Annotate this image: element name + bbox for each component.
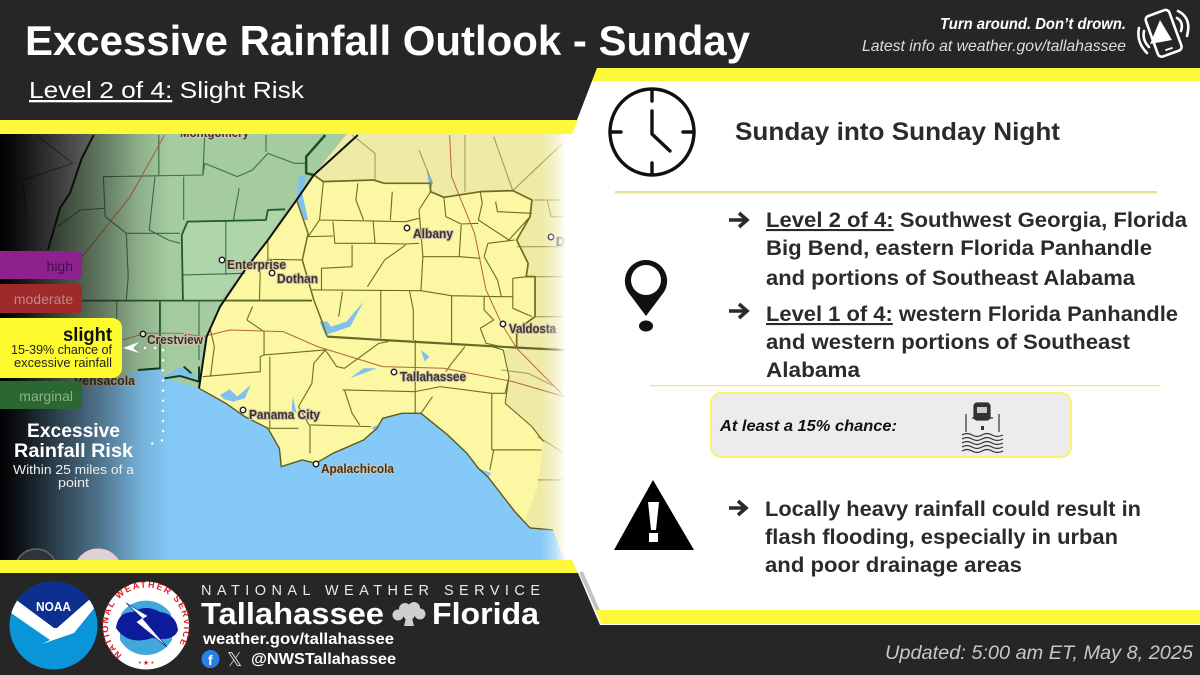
icon: NOAA logo — [8, 575, 98, 670]
icon: location pin — [625, 260, 667, 332]
city labels: Apalachicola — [321, 462, 395, 476]
legend: high: high — [47, 258, 73, 274]
text block: level 1 area: Level 1 of 4: western Florida Panhandle — [766, 303, 1178, 326]
text block: level 2 area: Level 2 of 4: Southwest Georgia, Florida — [766, 209, 1187, 232]
footer band — [0, 560, 1200, 675]
footer web and social: 𝕏 — [227, 650, 242, 671]
map caption: excessive rainfall risk — [13, 421, 135, 490]
icon: clock — [610, 89, 694, 175]
footer web and social — [202, 631, 396, 671]
text block: flash flooding: and poor drainage areas — [765, 554, 1022, 577]
footer office name — [201, 583, 540, 631]
footer office name: NATIONAL WEATHER SERVICE — [201, 583, 540, 599]
legend: slight: 15-39% chance of — [11, 343, 113, 357]
city labels: Montgomery — [180, 126, 249, 140]
text block: level 2 area — [729, 209, 1187, 290]
text block: level 1 area — [729, 303, 1178, 382]
time heading: Sunday into Sunday Night — [735, 118, 1061, 146]
footer web and social: f — [208, 652, 213, 668]
icon: warning triangle — [614, 480, 694, 550]
risk boundary line — [199, 135, 358, 388]
icon: NWS logo: NATIONAL WEATHER SERVICE — [102, 581, 190, 660]
icon: tree — [392, 602, 426, 626]
legend: slight — [0, 318, 122, 378]
icon: NWS logo: • ★ • — [138, 659, 154, 667]
map caption: excessive rainfall risk: Excessive — [27, 421, 120, 442]
icon: flooded car — [962, 403, 1003, 452]
city labels: Enterprise — [227, 258, 286, 272]
city labels: Panama City — [249, 408, 320, 422]
map caption: excessive rainfall risk: Rainfall Risk — [14, 441, 133, 462]
city labels — [74, 126, 565, 476]
city labels: Pensacola — [74, 374, 136, 388]
title: Excessive Rainfall Outlook - Sunday — [25, 17, 751, 64]
legend: moderate: moderate — [14, 291, 73, 307]
city labels: Tallahassee — [400, 370, 466, 384]
header band — [0, 0, 1200, 134]
callout: at least 15% chance — [711, 393, 1071, 457]
callout: at least 15% chance: At least a 15% chance: — [719, 418, 897, 435]
city labels: D — [556, 235, 565, 249]
city labels: Dothan — [277, 272, 318, 286]
text block: level 1 area: and western portions of Southeast — [766, 331, 1130, 354]
map panel — [0, 134, 565, 560]
callout pointer and dotted path — [123, 342, 163, 445]
text block: flash flooding: flash flooding, especially in urban — [765, 526, 1118, 549]
city labels: Albany — [413, 227, 453, 241]
text block: flash flooding: Locally heavy rainfall could result in — [765, 498, 1141, 521]
map caption: excessive rainfall risk: point — [58, 475, 89, 490]
legend: marginal: marginal — [19, 388, 73, 404]
slogan: Turn around. Don’t drown. — [940, 16, 1126, 33]
city labels: Valdosta — [509, 322, 557, 336]
city labels: Crestview — [147, 333, 203, 347]
slogan: Latest info at weather.gov/tallahassee — [862, 38, 1126, 55]
legend: slight: slight — [63, 324, 112, 346]
map caption: excessive rainfall risk: Within 25 miles of a — [13, 462, 135, 477]
text block: flash flooding — [729, 498, 1141, 577]
updated timestamp: Updated: 5:00 am ET, May 8, 2025 — [885, 643, 1193, 664]
footer office name: Florida — [432, 596, 540, 631]
legend: moderate — [0, 284, 82, 313]
footer office name: Tallahassee — [201, 596, 384, 631]
subtitle: risk level: Level 2 of 4: Slight Risk — [29, 77, 305, 103]
text block: level 2 area: and portions of Southeast Alabama — [766, 267, 1135, 290]
text block: level 2 area: Big Bend, eastern Florida Panhandle — [766, 237, 1152, 260]
icon: NOAA logo: NOAA — [36, 599, 72, 614]
legend: high — [0, 251, 82, 279]
text block: level 1 area: Alabama — [766, 359, 860, 382]
slogan — [862, 16, 1126, 55]
icon: phone alert — [1138, 9, 1188, 58]
legend: slight: excessive rainfall — [14, 356, 112, 370]
footer web and social: weather.gov/tallahassee — [202, 631, 394, 648]
legend: marginal — [0, 381, 82, 409]
footer web and social: @NWSTallahassee — [251, 651, 396, 668]
